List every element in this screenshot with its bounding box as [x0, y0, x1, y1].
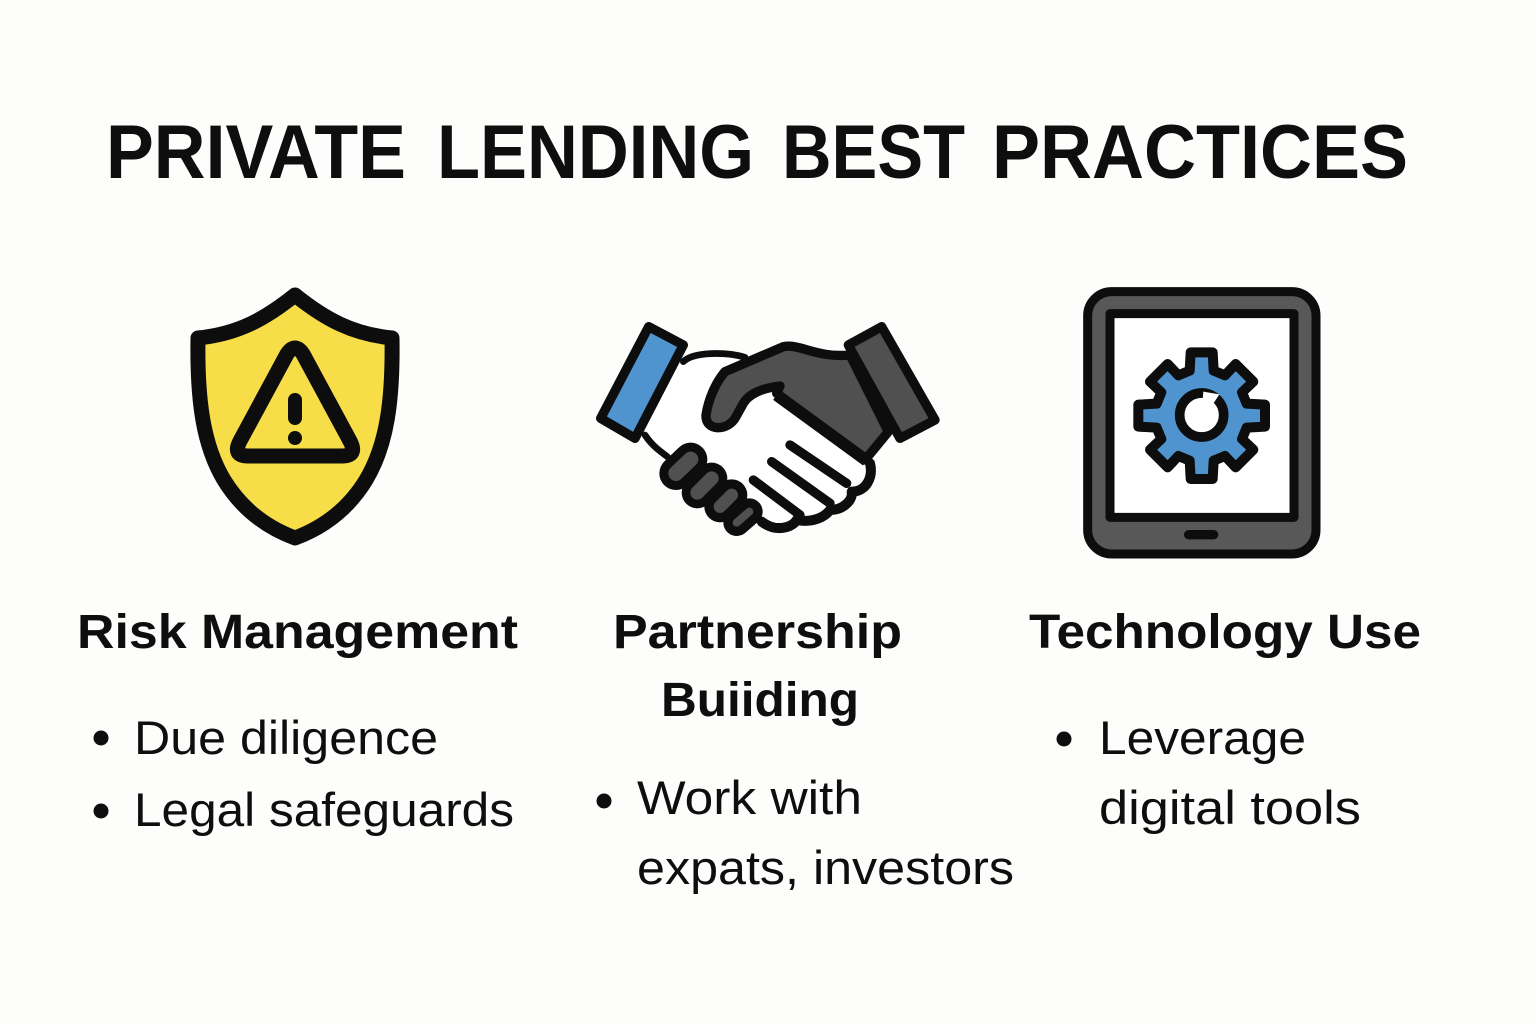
title: LENDING	[437, 110, 754, 195]
list: partnership building: expats, investors	[637, 841, 1014, 894]
heading: partnership building: Partnership	[613, 606, 902, 659]
title: BEST	[782, 110, 965, 195]
list: partnership building	[596, 771, 1014, 894]
icon: tablet with gear	[1088, 292, 1316, 554]
heading: partnership building: Buiiding	[661, 674, 859, 727]
list: technology use: Leverage	[1099, 711, 1306, 764]
list: partnership building: Work with	[637, 771, 862, 824]
list: risk management	[94, 711, 514, 836]
title: PRIVATE	[106, 110, 406, 195]
heading: partnership building	[613, 606, 902, 727]
panel: technology use	[1029, 292, 1421, 834]
panel: partnership building	[596, 327, 1014, 894]
finger outlines and fills	[676, 459, 749, 523]
list: risk management: Due diligence	[134, 711, 438, 764]
title	[106, 110, 1408, 195]
heading: technology use: Technology Use	[1029, 606, 1421, 659]
panel: risk management	[77, 295, 518, 836]
icon: warning shield	[198, 295, 392, 538]
title: PRACTICES	[992, 110, 1408, 195]
icon: handshake	[601, 327, 935, 528]
heading: risk management: Risk Management	[77, 606, 518, 659]
list: risk management: Legal safeguards	[134, 783, 514, 836]
list: technology use: digital tools	[1099, 781, 1361, 834]
list: technology use	[1056, 711, 1361, 834]
